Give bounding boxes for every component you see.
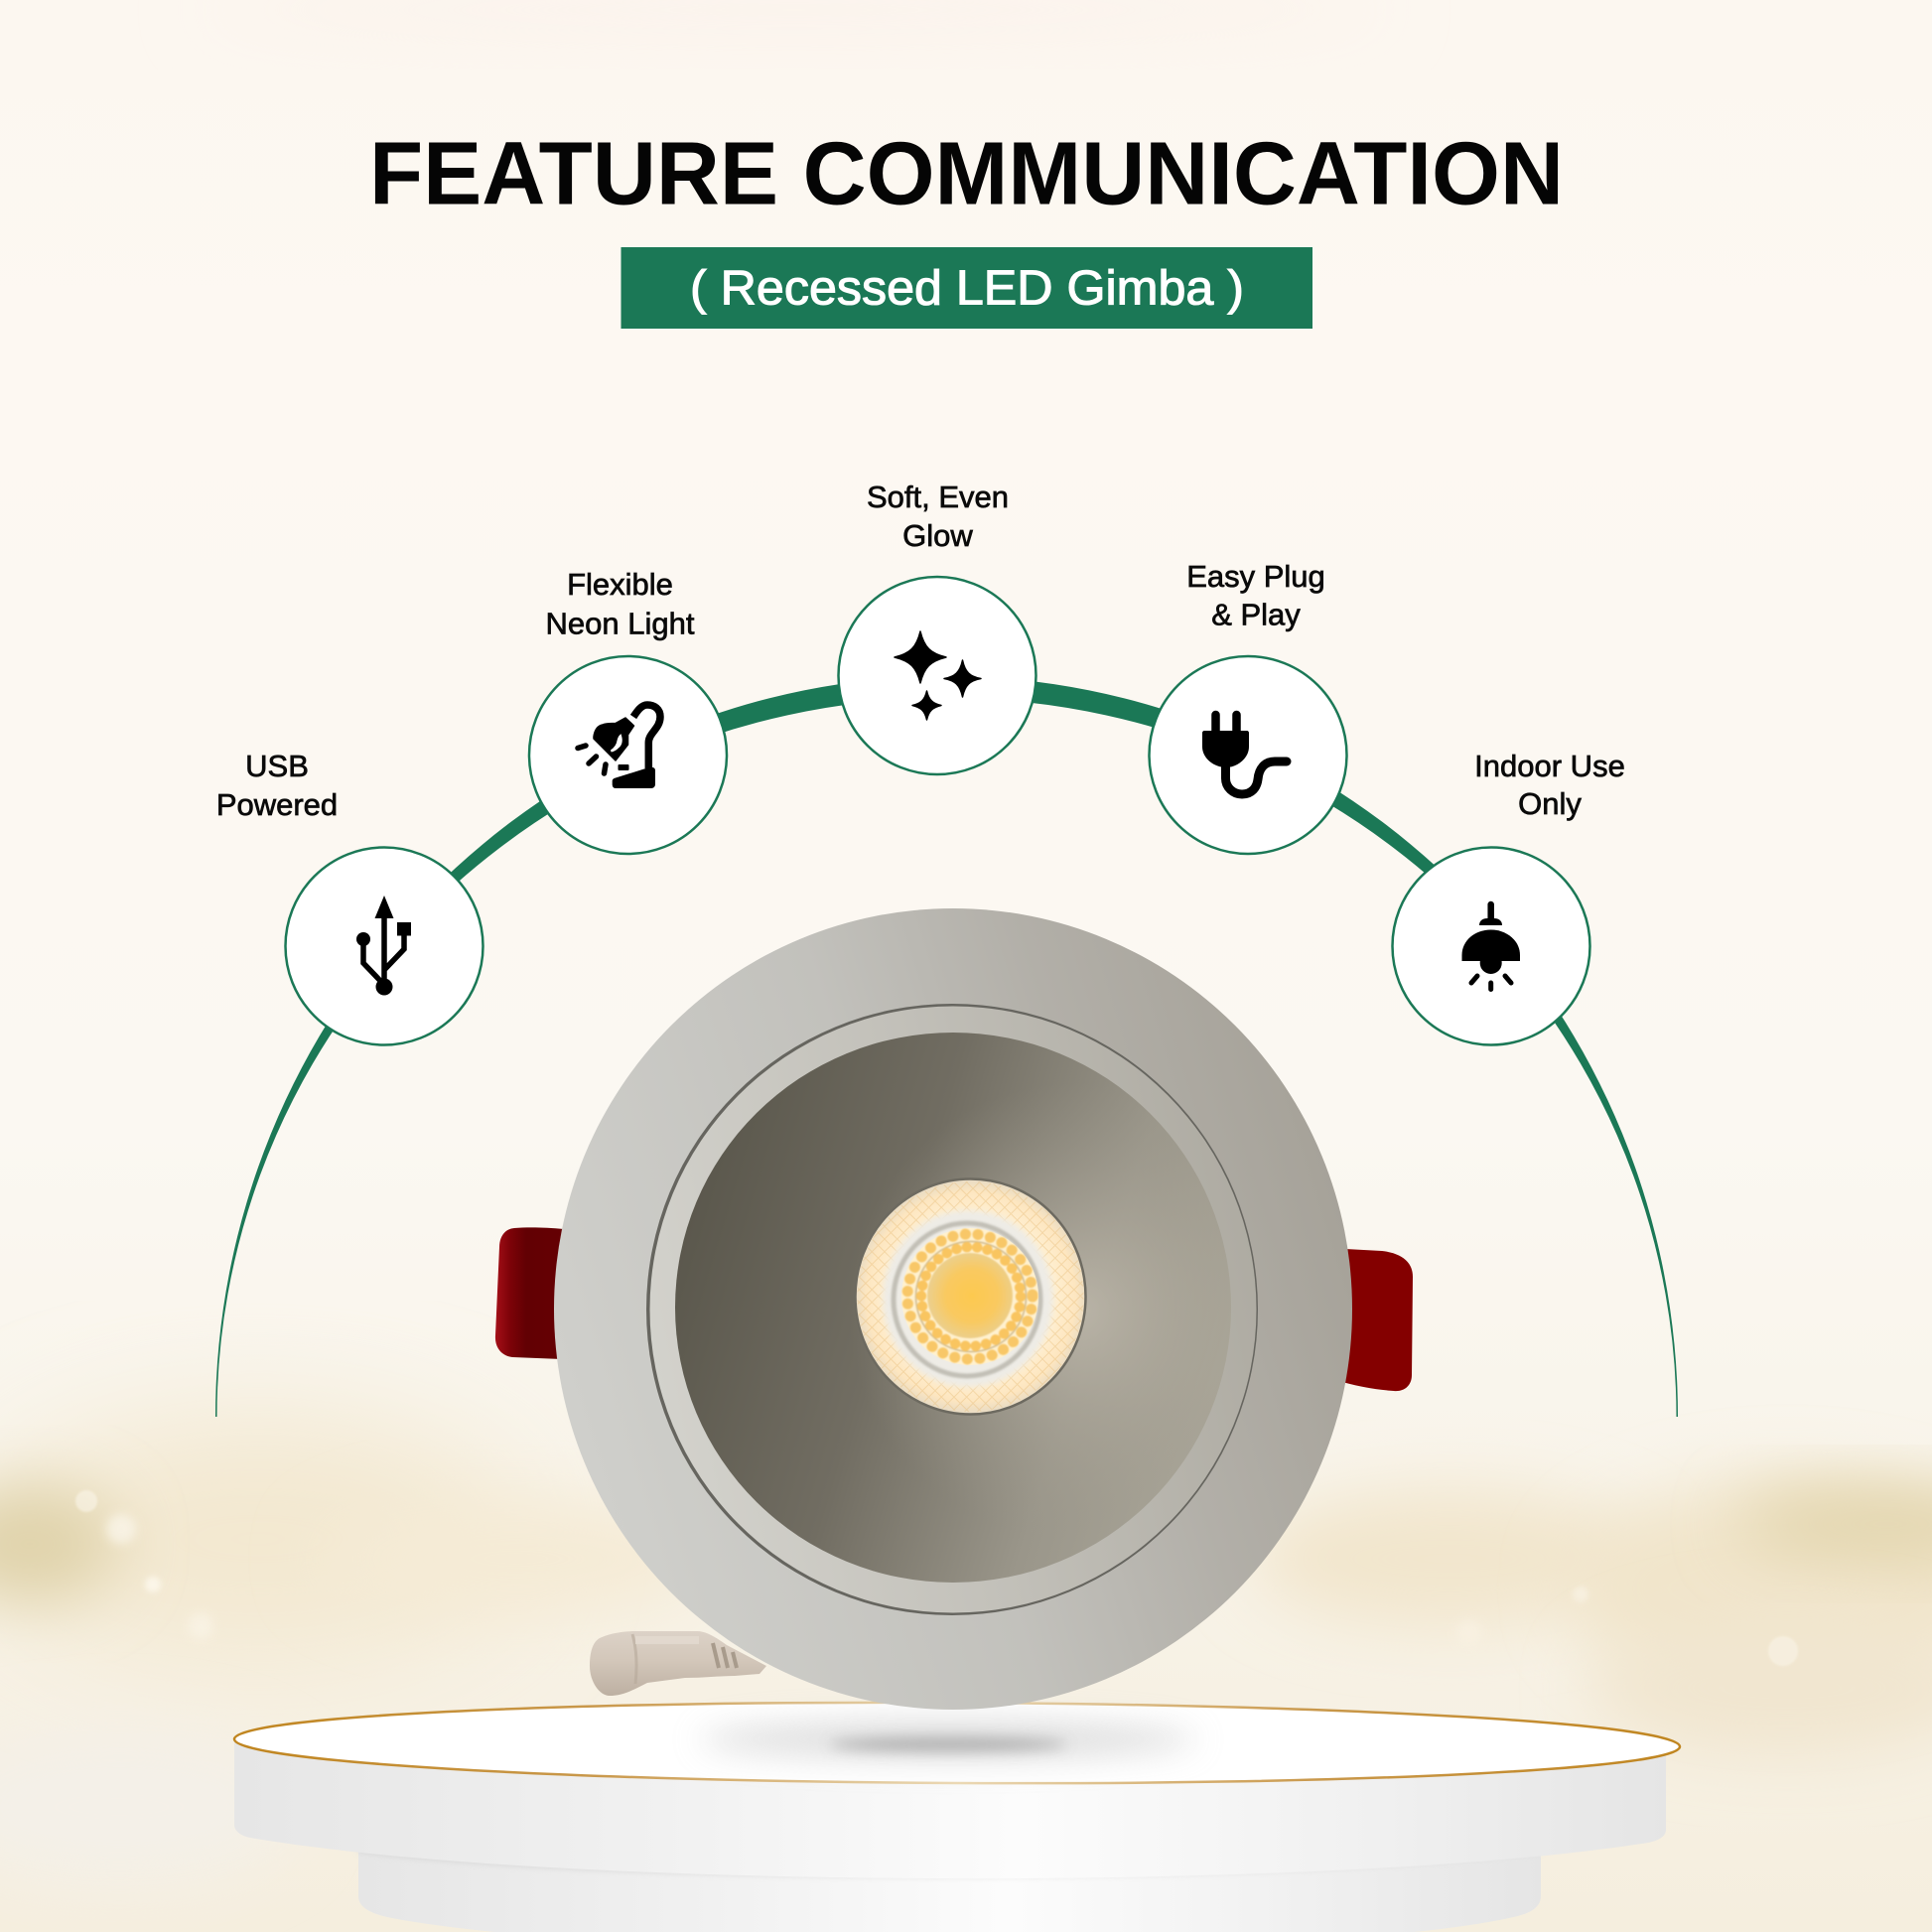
podium [234, 1699, 1680, 1932]
green arc [215, 676, 1678, 1417]
label: Easy Plug [1186, 559, 1325, 594]
feature: soft even glow [838, 480, 1036, 774]
label: Neon Light [546, 606, 695, 641]
LED lens [856, 1179, 1086, 1414]
podium top surface [234, 1699, 1680, 1787]
icon: USB [356, 896, 411, 995]
feature: indoor use only [1392, 749, 1625, 1044]
label: Indoor Use [1474, 749, 1625, 783]
node circle [1150, 656, 1346, 854]
right red clip [1342, 1249, 1413, 1391]
node circle [529, 656, 727, 854]
inner dark edge [646, 1004, 1258, 1615]
subtitle badge: ( Recessed LED Gimba ) [690, 262, 1244, 316]
power connector [590, 1631, 766, 1696]
label: Powered [216, 787, 338, 822]
reflector cone [675, 1033, 1231, 1583]
feature: USB powered [216, 749, 483, 1044]
outer trim ring [554, 908, 1352, 1710]
title: FEATURE COMMUNICATION [369, 125, 1564, 224]
spotlight product [495, 908, 1413, 1710]
label: Only [1518, 786, 1582, 821]
node circle [286, 848, 483, 1044]
label: Flexible [567, 567, 673, 602]
left red clip [495, 1227, 564, 1359]
icon: desk lamp [578, 705, 660, 788]
node circle [838, 577, 1036, 774]
label: Glow [902, 518, 973, 553]
contact shadow [700, 1720, 1196, 1759]
podium upper body [234, 1739, 1666, 1878]
inner light ring [649, 1007, 1257, 1612]
feature: flexible neon light [529, 567, 727, 854]
label: & Play [1211, 598, 1301, 631]
label: USB [245, 749, 309, 783]
icon: sparkles [895, 631, 981, 720]
subtitle badge [621, 247, 1312, 329]
label: Soft, Even [867, 480, 1009, 514]
feature: easy plug and play [1150, 559, 1346, 854]
icon: plug [1202, 715, 1287, 794]
node circle [1392, 848, 1590, 1044]
podium lower step [358, 1847, 1541, 1932]
icon: pendant lamp [1461, 904, 1520, 989]
